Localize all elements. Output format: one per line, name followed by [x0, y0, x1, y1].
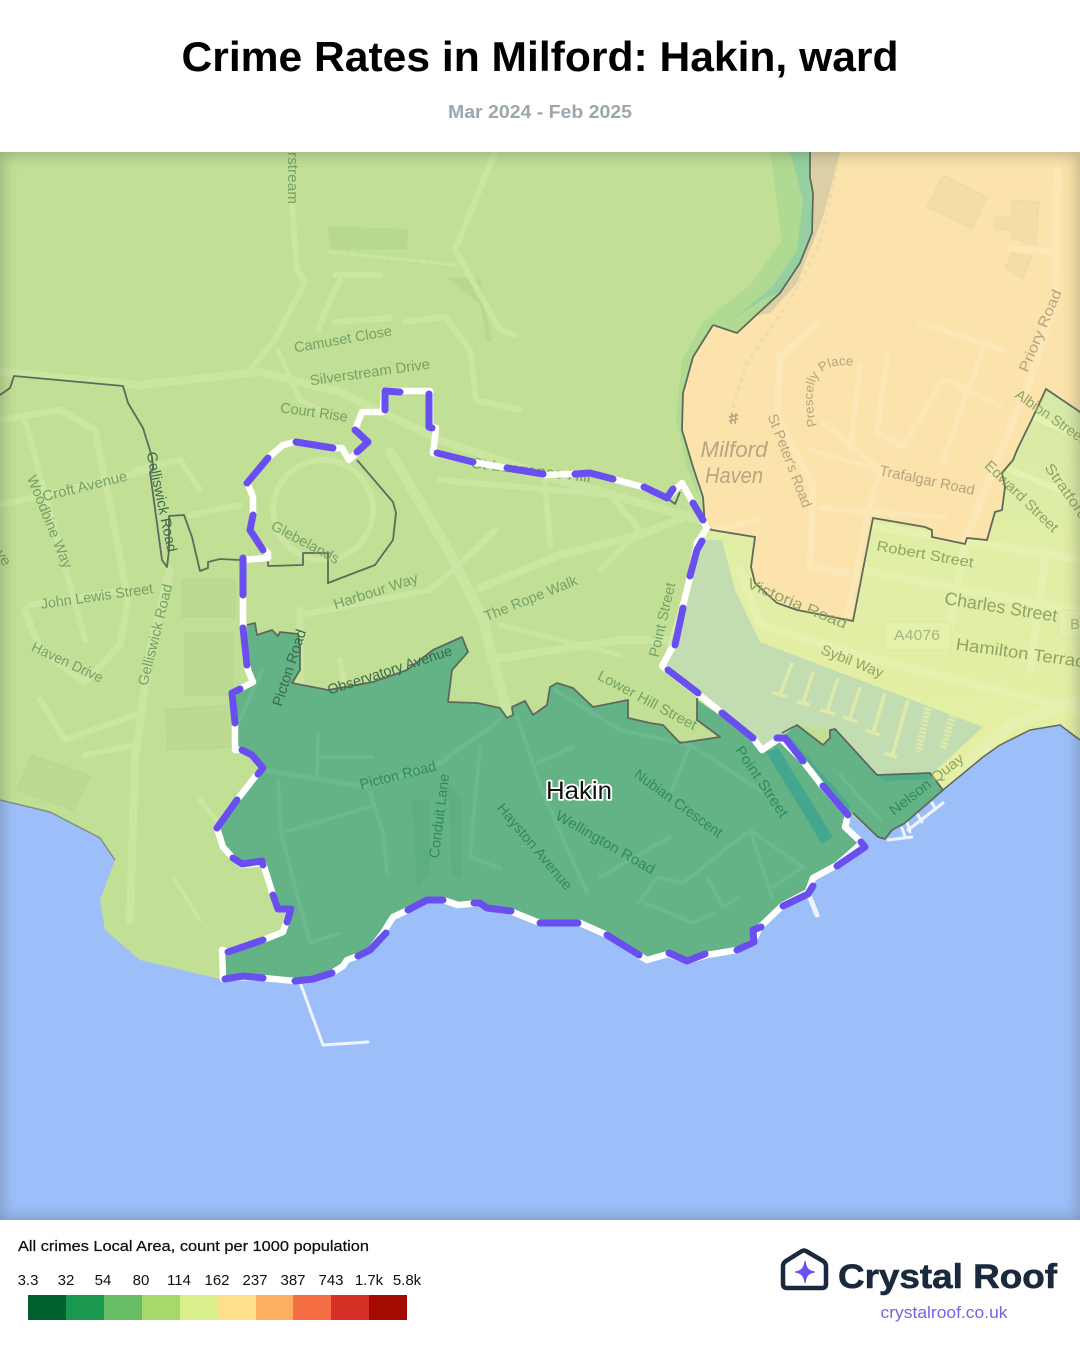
legend scale values: 387	[280, 1272, 306, 1289]
label: John Lewis Street: John Lewis Street	[40, 581, 154, 613]
label: Point Street ward: Point Street	[731, 743, 791, 821]
label: Court Rise: Court Rise	[279, 400, 349, 426]
ward: roads	[679, 740, 684, 742]
label: Milford Haven: Milford	[700, 437, 768, 462]
label: Hakin ward name: Hakin	[546, 777, 612, 805]
icon: house with star	[783, 1250, 826, 1288]
label: Victoria Road: Victoria Road	[744, 575, 850, 633]
label: Wellington Road: Wellington Road	[553, 808, 657, 878]
label: Glebelands: Glebelands	[268, 518, 342, 568]
road shield: clipped B road: B	[1070, 617, 1080, 633]
yellow district	[662, 389, 1080, 790]
label: Milford Haven	[700, 437, 768, 488]
icon: railway station	[729, 413, 738, 424]
legend	[18, 1238, 422, 1320]
yellow roads	[740, 415, 1080, 770]
ward: teal marina strips	[766, 735, 935, 844]
label: Gelliswick Road lower: Gelliswick Road	[136, 583, 176, 687]
legend scale values: 162	[204, 1272, 230, 1289]
label: Woodbine Way: Woodbine Way	[23, 473, 75, 572]
land: roads west and north	[0, 152, 705, 920]
Hakin ward low-crime area west	[217, 623, 862, 981]
label: Milford Haven: Haven	[705, 463, 763, 488]
legend scale values: 80	[133, 1272, 149, 1289]
land: sports fields	[17, 226, 492, 810]
river strip	[735, 152, 813, 318]
label: Robert Street: Robert Street	[875, 539, 975, 571]
legend colour ramp	[28, 1295, 407, 1320]
label: Picton Road north: Picton Road	[270, 627, 310, 709]
label: Point Street north: Point Street	[647, 581, 679, 659]
label: Harbour Way: Harbour Way	[332, 571, 421, 613]
label: Camuset Close: Camuset Close	[293, 324, 393, 356]
label: Charles Street: Charles Street	[943, 588, 1059, 626]
label: Haven Drive: Haven Drive	[29, 639, 105, 687]
legend scale values: 32	[58, 1272, 74, 1289]
label: Prescelly Place: Prescelly Place	[806, 358, 852, 427]
road shield: clipped B road	[1059, 610, 1080, 638]
label: St Peter's Road: St Peter's Road	[764, 412, 814, 510]
legend scale values: 114	[167, 1272, 191, 1289]
piers	[301, 803, 943, 1045]
orange area: roads	[715, 170, 1057, 617]
wordmark: Crystal Roof	[838, 1258, 1058, 1296]
map	[0, 152, 1080, 1220]
ward: darker patches	[412, 783, 462, 887]
website: crystalroof.co.uk	[880, 1304, 1008, 1322]
label: Observatory Avenue: Observatory Avenue	[326, 643, 454, 699]
label: Nubian Crescent: Nubian Crescent	[631, 767, 725, 841]
land base	[0, 152, 868, 979]
water	[0, 725, 1080, 1220]
subtitle: date range: Mar 2024 - Feb 2025	[448, 102, 632, 122]
label: Picton Road: Picton Road	[358, 759, 438, 793]
legend scale values: 5.8k	[393, 1272, 422, 1289]
Hakin ward low-crime area east	[780, 725, 943, 839]
orange area: buildings	[927, 175, 1039, 278]
legend scale values: 237	[242, 1272, 268, 1289]
label: Conduit Lane: Conduit Lane	[427, 773, 453, 859]
label: Gelliswick Road upper: Gelliswick Road	[143, 450, 179, 554]
railway dotted line	[730, 167, 837, 417]
label: Lower Hill Street: Lower Hill Street	[595, 668, 699, 734]
label: Nelson Quay: Nelson Quay	[887, 751, 968, 819]
ward borders: neighbouring areas	[0, 376, 1080, 839]
legend scale values	[18, 1272, 422, 1289]
label: St Lawrence Hill: St Lawrence Hill	[470, 456, 592, 486]
road shield: A4076	[884, 622, 951, 650]
marina pontoons	[772, 663, 953, 757]
high-crime-rate orange area	[682, 140, 1080, 621]
legend title: All crimes Local Area, count per 1000 population	[18, 1238, 369, 1255]
label: rstream: rstream	[284, 152, 300, 204]
title: Crime Rates in Milford: Hakin, ward	[182, 33, 898, 80]
logo: Crystal Roof	[783, 1250, 1058, 1322]
label: The Rope Walk: The Rope Walk	[482, 573, 581, 625]
orange area outline	[682, 140, 1080, 621]
legend scale values: 3.3	[18, 1272, 38, 1289]
land: darker wooded valley	[676, 152, 812, 500]
legend scale values: 54	[95, 1272, 111, 1289]
coast line west	[0, 800, 115, 860]
label: Trafalgar Road: Trafalgar Road	[878, 463, 976, 499]
label: Silverstream Drive: Silverstream Drive	[309, 357, 431, 389]
label: Sybil Way: Sybil Way	[818, 642, 886, 682]
label: Croft Avenue: Croft Avenue	[41, 469, 129, 505]
legend scale values: 1.7k	[355, 1272, 384, 1289]
marina basin	[662, 540, 983, 775]
label: Edward Street: Edward Street	[981, 458, 1061, 536]
label: Priory Road: Priory Road	[1016, 287, 1066, 375]
road shield: A4076: A4076	[894, 628, 940, 644]
tan strip beside railway	[755, 152, 840, 316]
label: Hayston Avenue: Hayston Avenue	[493, 800, 575, 894]
ward boundary: white line with purple dashes	[217, 391, 865, 981]
legend scale values: 743	[318, 1272, 344, 1289]
